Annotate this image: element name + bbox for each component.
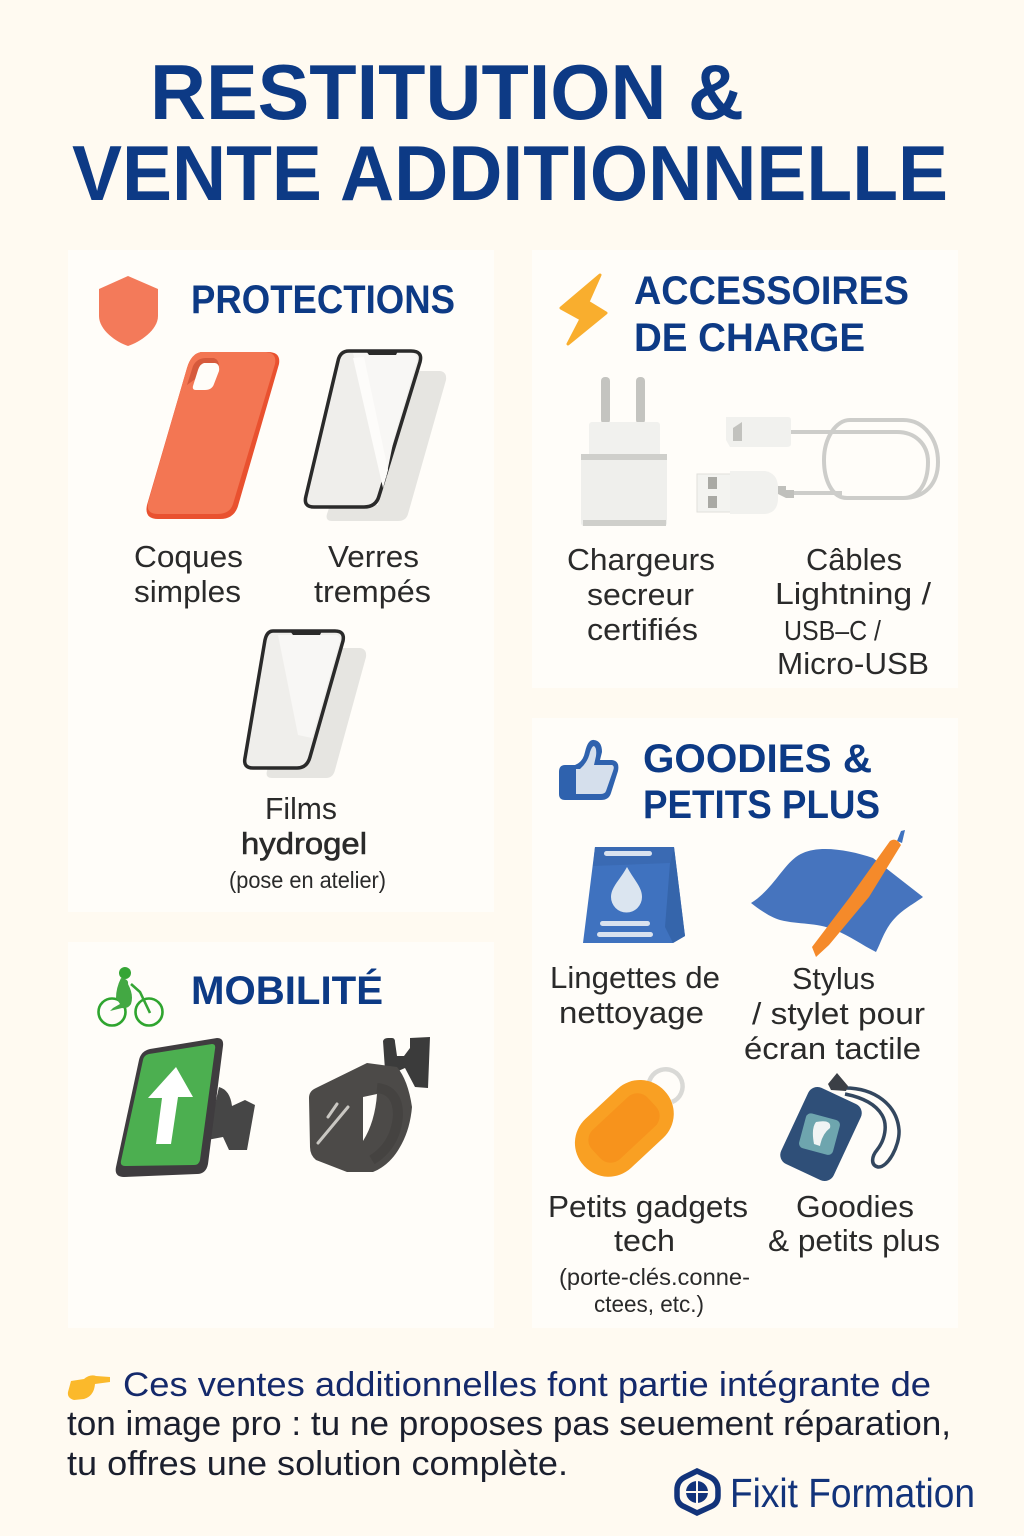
label: petits gadgets tech: (porte-clés.conne- — [559, 1264, 750, 1290]
heading: accessoires de charge — [634, 269, 909, 360]
label: coques simples — [134, 539, 243, 609]
label: stylus: écran tactile — [744, 1031, 921, 1066]
title: RESTITUTION & — [150, 48, 744, 136]
panel: protections — [68, 250, 494, 912]
label: coques simples: simples — [134, 574, 241, 609]
footer text: tu offres une solution complète. — [67, 1445, 568, 1483]
icon: phone bike mount — [116, 1038, 255, 1177]
logo: fixit formation: Fixit Formation — [730, 1470, 975, 1516]
label: lingettes: Lingettes de — [550, 960, 720, 995]
label: goodies: Goodies — [796, 1189, 914, 1224]
footer text: Ces ventes additionnelles font partie intégrante de — [123, 1366, 931, 1404]
heading: goodies et petits plus: PETITS PLUS — [643, 783, 880, 827]
icon: stylus and cloth — [751, 830, 923, 957]
label: chargeurs secteur certifiés: certifiés — [587, 612, 698, 647]
label: coques simples: Coques — [134, 539, 243, 574]
heading: goodies et petits plus — [643, 737, 880, 827]
icon: tempered glass — [305, 351, 446, 521]
label: verres trempés — [314, 539, 431, 609]
icon: camera bike mount — [309, 1037, 430, 1172]
label: petits gadgets tech — [548, 1189, 750, 1317]
label: petits gadgets tech: Petits gadgets — [548, 1189, 748, 1224]
label: petits gadgets tech: tech — [614, 1223, 675, 1258]
label: lingettes — [550, 960, 720, 1030]
footer text — [67, 1366, 951, 1483]
title: VENTE ADDITIONNELLE — [72, 129, 948, 217]
title — [72, 48, 948, 217]
icon: green cyclist — [98, 967, 162, 1026]
label: films hydrogel: (pose en atelier) — [229, 867, 386, 893]
heading: accessoires de charge: ACCESSOIRES — [634, 269, 909, 313]
icon: usb cable — [697, 417, 938, 514]
icon: wall charger — [581, 377, 667, 526]
label: câbles: Lightning / — [775, 576, 931, 611]
icon: hydrogel film — [245, 631, 366, 778]
label: films hydrogel: Films — [265, 791, 337, 826]
icon: shield — [99, 276, 158, 346]
label: lingettes: nettoyage — [559, 995, 704, 1030]
label: chargeurs secteur certifiés: secreur — [587, 577, 694, 612]
label: chargeurs secteur certifiés — [567, 542, 715, 647]
heading: accessoires de charge: DE CHARGE — [634, 316, 865, 360]
panel: goodies et petits plus — [532, 718, 958, 1328]
label: câbles: Câbles — [806, 542, 902, 577]
label: câbles: Micro-USB — [777, 646, 929, 681]
icon: cleaning wipes packet — [583, 847, 685, 943]
icon: orange phone case — [146, 352, 279, 519]
label: goodies — [768, 1189, 940, 1258]
icon: navy pouch — [777, 1073, 899, 1184]
panel: accessoires de charge — [532, 250, 958, 688]
heading: mobilité: MOBILITÉ — [191, 968, 383, 1013]
label: verres trempés: Verres — [328, 539, 419, 574]
label: câbles — [775, 542, 931, 681]
icon: thumbs up — [559, 740, 618, 800]
label: stylus: Stylus — [792, 961, 875, 996]
label: verres trempés: trempés — [314, 574, 431, 609]
label: câbles: USB–C / — [784, 615, 881, 646]
icon: pointing hand — [68, 1375, 110, 1400]
label: films hydrogel — [229, 791, 386, 893]
footer text: ton image pro : tu ne proposes pas seuement réparation, — [67, 1405, 951, 1443]
label: films hydrogel: hydrogel — [241, 826, 367, 861]
icon: orange keychain — [561, 1066, 687, 1190]
heading: protections: PROTECTIONS — [191, 278, 455, 322]
label: petits gadgets tech: ctees, etc.) — [594, 1291, 704, 1317]
icon: lightning bolt — [561, 275, 606, 344]
label: chargeurs secteur certifiés: Chargeurs — [567, 542, 715, 577]
label: stylus: / stylet pour — [752, 996, 925, 1031]
label: goodies: & petits plus — [768, 1223, 940, 1258]
panel: mobilité — [68, 942, 494, 1328]
label: stylus — [744, 961, 925, 1066]
heading: goodies et petits plus: GOODIES & — [643, 737, 872, 781]
